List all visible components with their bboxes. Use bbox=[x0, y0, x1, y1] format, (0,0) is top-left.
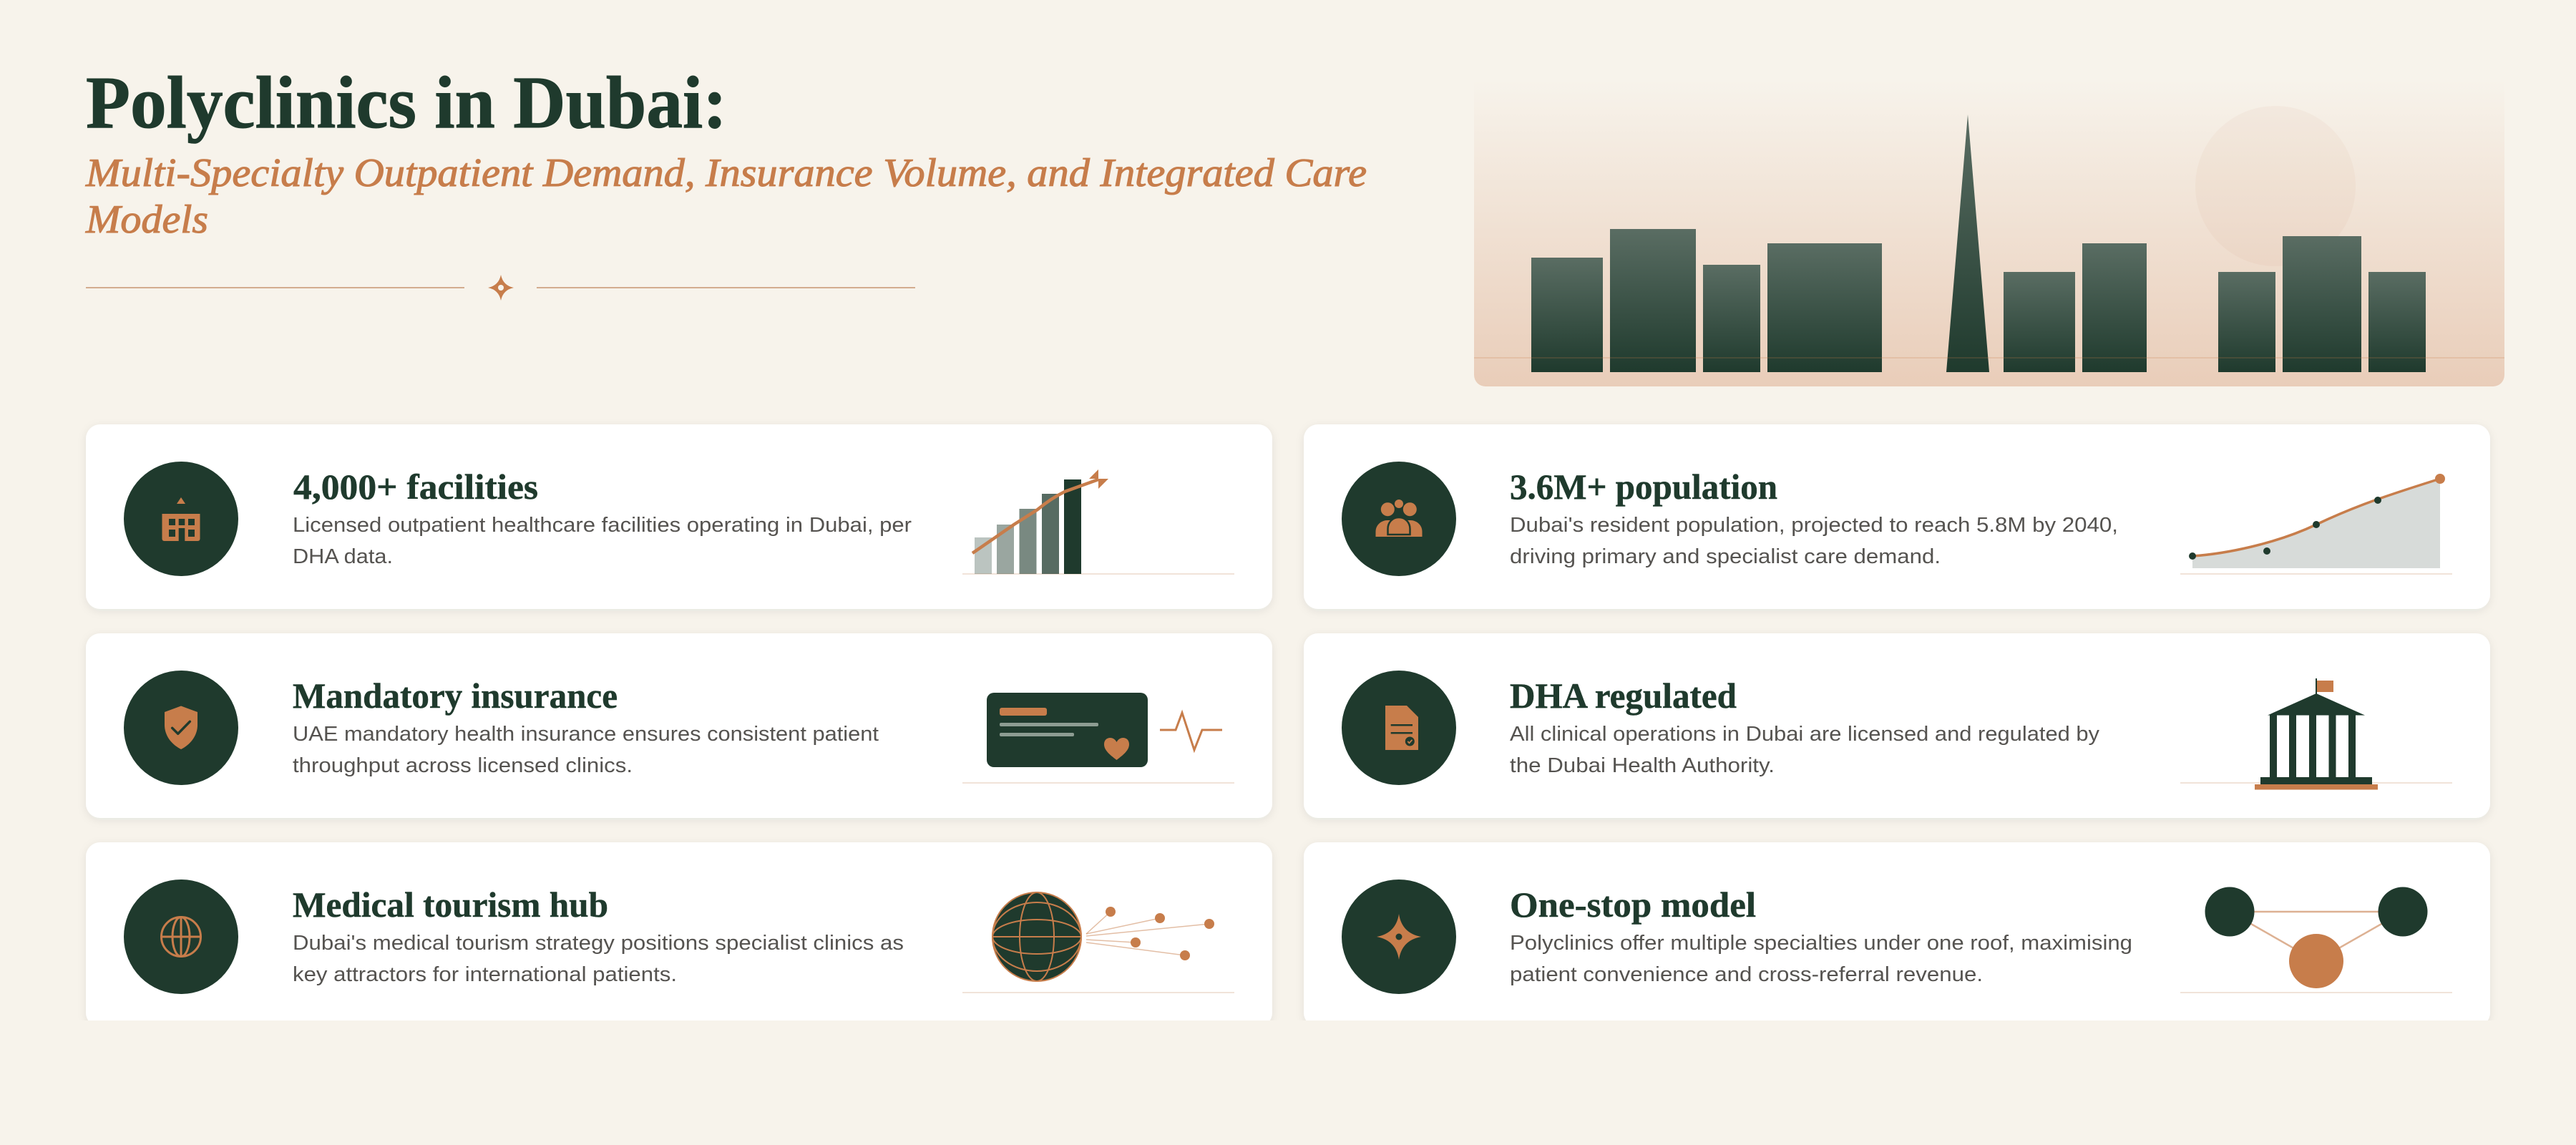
card heading: Medical tourism hub bbox=[293, 885, 608, 925]
insurance card and pulse line bbox=[962, 693, 1234, 784]
card: medical tourism bbox=[86, 842, 1272, 1027]
subtitle: Models bbox=[85, 198, 208, 242]
card description: driving primary and specialist care demand. bbox=[1510, 545, 1941, 568]
subtitle bbox=[85, 151, 1367, 242]
card description: DHA data. bbox=[293, 545, 393, 568]
title: Polyclinics in Dubai: bbox=[86, 62, 727, 144]
card description: Dubai's medical tourism strategy positions specialist clinics as bbox=[293, 932, 904, 955]
card heading: 3.6M+ population bbox=[1510, 467, 1777, 507]
card: facilities bbox=[86, 424, 1272, 609]
card description bbox=[293, 723, 879, 777]
card description bbox=[1510, 932, 2132, 986]
card: one-stop model bbox=[1304, 842, 2490, 1027]
card description bbox=[293, 932, 904, 986]
icon: licence document bbox=[1342, 671, 1456, 785]
card description: the Dubai Health Authority. bbox=[1510, 754, 1775, 777]
card: regulation bbox=[1304, 633, 2490, 818]
buildings bbox=[1531, 114, 2426, 372]
card: population bbox=[1304, 424, 2490, 609]
card heading: 4,000+ facilities bbox=[293, 467, 538, 507]
card description: patient convenience and cross-referral revenue. bbox=[1510, 963, 1983, 986]
card heading: DHA regulated bbox=[1510, 676, 1737, 716]
card description bbox=[1510, 514, 2118, 568]
card: insurance bbox=[86, 633, 1272, 818]
icon: building bbox=[124, 462, 238, 576]
network of specialties diagram bbox=[2180, 887, 2452, 993]
card description: Dubai's resident population, projected to reach 5.8M by 2040, bbox=[1510, 514, 2118, 537]
icon: people bbox=[1342, 462, 1456, 576]
card heading: One-stop model bbox=[1510, 885, 1756, 925]
icon: four-point star bbox=[1342, 880, 1456, 994]
area line chart bbox=[2180, 474, 2452, 575]
icon: shield bbox=[124, 671, 238, 785]
subtitle: Multi-Specialty Outpatient Demand, Insurance Volume, and Integrated Care bbox=[85, 151, 1367, 195]
government building with flag bbox=[2180, 678, 2452, 790]
card description: throughput across licensed clinics. bbox=[293, 754, 633, 777]
card heading: Mandatory insurance bbox=[293, 676, 618, 716]
card description bbox=[1510, 723, 2100, 777]
globe with outbound routes bbox=[962, 892, 1234, 993]
card description: All clinical operations in Dubai are licensed and regulated by bbox=[1510, 723, 2100, 746]
card description: UAE mandatory health insurance ensures consistent patient bbox=[293, 723, 879, 746]
bar chart with growth arrow bbox=[962, 469, 1234, 575]
card description: Licensed outpatient healthcare facilities operating in Dubai, per bbox=[293, 514, 912, 537]
icon: globe bbox=[124, 880, 238, 994]
divider with star ornament bbox=[86, 275, 915, 301]
skyline illustration bbox=[1474, 80, 2504, 386]
sun bbox=[2195, 106, 2356, 266]
card description: Polyclinics offer multiple specialties under one roof, maximising bbox=[1510, 932, 2132, 955]
card description: key attractors for international patients. bbox=[293, 963, 677, 986]
card description bbox=[295, 517, 912, 564]
